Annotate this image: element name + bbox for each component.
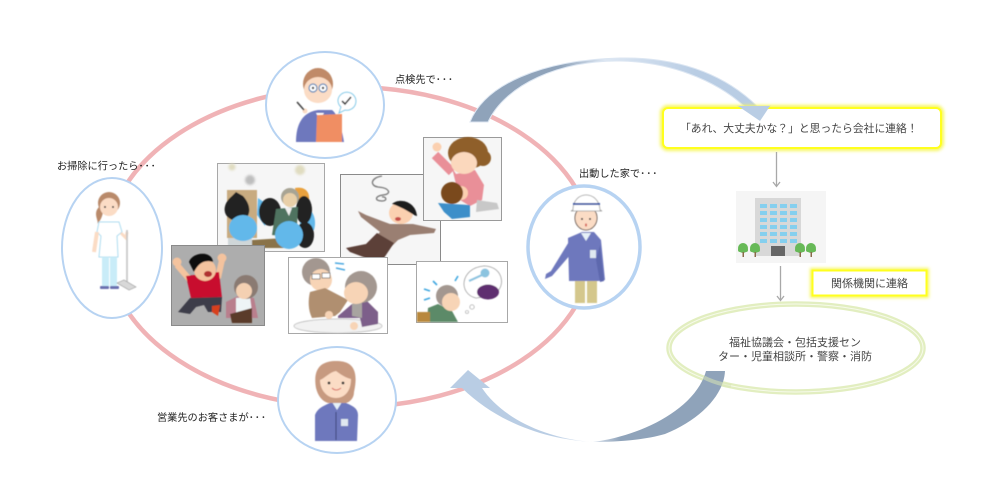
green ellipse: related agencies: ター・児童相談所・警察・消防 [718, 349, 872, 363]
label: cleaner: お掃除に行ったら･･･ [57, 160, 157, 172]
person circle: sales staff (bottom) [278, 347, 396, 453]
photo: mother and child [424, 137, 502, 220]
callout: contact the company [662, 107, 942, 149]
person circle: inspector (top) [266, 52, 384, 158]
icon: worker in helmet [545, 195, 605, 303]
label: worker: 出動した家で･･･ [579, 167, 658, 180]
person circle: worker (right) [528, 186, 640, 308]
arrow: callout to building [773, 152, 780, 186]
icon: company building [736, 191, 826, 263]
arrow: building to agencies [777, 266, 784, 300]
green ring overlap on bottom arrow [704, 378, 731, 386]
top arrow head over callout [738, 106, 770, 121]
bottom blue curved arrow [450, 370, 725, 442]
icon: inspector with clipboard [296, 68, 356, 142]
green ellipse: related agencies [669, 304, 923, 392]
callout: contact the company: 「あれ、大丈夫かな？」と思ったら会社に連絡！ [680, 121, 918, 135]
top blue curved arrow [470, 58, 770, 122]
person circle: cleaner (left) [62, 178, 162, 318]
photo: angry man and elderly woman [172, 246, 264, 326]
photo: elderly couple [288, 258, 388, 334]
label: sales: 営業先のお客さまが･･･ [157, 411, 267, 424]
photo: lying man [340, 174, 440, 264]
label: inspector: 点検先で･･･ [395, 73, 454, 86]
photo: forgetful elderly man [416, 262, 508, 322]
callout: contact related agencies: 関係機関に連絡 [831, 276, 908, 290]
pink ring connecting the four people [107, 87, 593, 407]
photo: cluttered room [218, 164, 324, 252]
icon: cleaner with mop [94, 192, 136, 290]
labels around the ring [57, 73, 658, 424]
callout: contact related agencies [812, 270, 927, 296]
green ellipse: related agencies: 福祉協議会・包括支援セン [729, 335, 861, 349]
icon: sales staff [315, 361, 358, 441]
